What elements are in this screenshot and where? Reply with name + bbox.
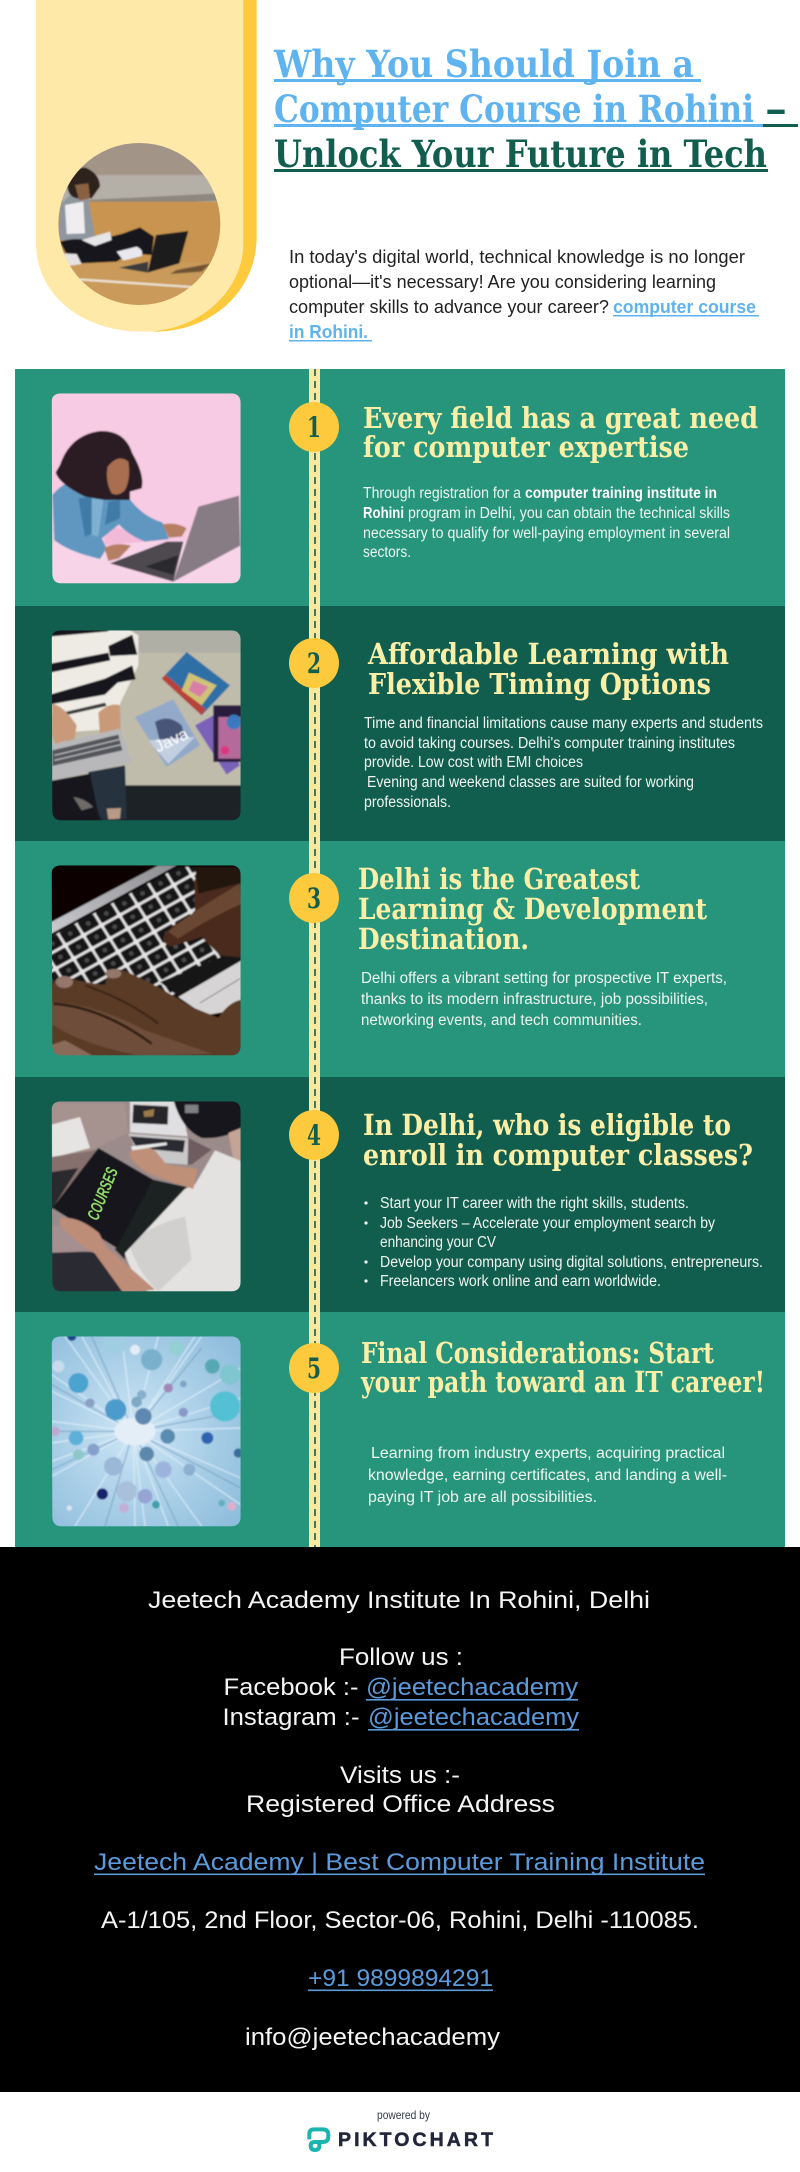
- intro paragraph: In today's digital world, technical knowledge is no longer: [289, 246, 745, 267]
- header decorative pill with photo: [36, 0, 257, 332]
- section 4 bullet list: Job Seekers – Accelerate your employment search by: [380, 1215, 715, 1232]
- section 5 text: paying IT job are all possibilities.: [368, 1489, 597, 1506]
- section 1 text: necessary to qualify for well-paying employment in several: [363, 525, 730, 542]
- section 4 number badge: [289, 1110, 339, 1160]
- address heading: Registered Office Address: [246, 1791, 555, 1818]
- section 3 heading: Delhi is the Greatest: [358, 862, 641, 896]
- powered by Piktochart logo: [309, 2108, 493, 2151]
- email: info@jeetechacademy: [245, 2024, 500, 2051]
- section 5 text: Learning from industry experts, acquiring practical: [371, 1445, 725, 1462]
- title: [273, 42, 798, 176]
- section 5 heading: [360, 1336, 765, 1399]
- photo: girl with laptop on pink: [52, 393, 241, 584]
- section 2 heading: Affordable Learning with: [367, 637, 729, 671]
- panel: section 1 background: [15, 369, 785, 606]
- section 3 number badge: [289, 873, 339, 923]
- section 3 heading: Learning & Development: [358, 892, 708, 926]
- social links: Facebook :-: [224, 1674, 358, 1701]
- section 1 text: computer training institute in: [525, 485, 717, 502]
- section 1 heading: [363, 401, 758, 464]
- section 5 number badge: 5: [307, 1352, 321, 1385]
- section 3 number badge: 3: [307, 882, 321, 915]
- section 1 heading: Every field has a great need: [363, 401, 758, 435]
- section 2 number badge: 2: [307, 647, 321, 680]
- social links: [222, 1644, 579, 1731]
- section 1 number badge: [289, 402, 339, 452]
- section 2 text: Evening and weekend classes are suited for working: [367, 774, 694, 791]
- section 3 text: thanks to its modern infrastructure, job possibilities,: [361, 991, 708, 1008]
- section 1 text: program in Delhi, you can obtain the technical skills: [408, 505, 730, 522]
- social links: Instagram :-: [222, 1704, 360, 1731]
- photo: blue crystal burst: [52, 1336, 241, 1526]
- website link: Jeetech Academy | Best Computer Training Institute: [94, 1849, 705, 1876]
- timeline dashed vertical line: [309, 369, 320, 1547]
- section 1 text: Through registration for a: [363, 485, 521, 502]
- section 5 text: knowledge, earning certificates, and landing a well-: [368, 1467, 727, 1484]
- social links: Follow us :: [339, 1644, 463, 1671]
- section 2 heading: [367, 637, 729, 701]
- title: Why You Should Join a: [273, 42, 694, 86]
- powered by Piktochart logo: PIKTOCHART: [338, 2129, 493, 2151]
- section 2 text: to avoid taking courses. Delhi's computer training institutes: [364, 735, 735, 752]
- section 3 text: networking events, and tech communities.: [361, 1012, 642, 1029]
- panel: section 4 background: [15, 1077, 785, 1312]
- photo: person holding tablet showing COURSES: COURSES: [83, 1164, 122, 1223]
- address heading: Visits us :-: [340, 1762, 460, 1789]
- section 1 text: sectors.: [363, 544, 411, 561]
- section 3 heading: [358, 862, 708, 956]
- intro paragraph: computer skills to advance your career?: [289, 296, 609, 317]
- section 4 heading: In Delhi, who is eligible to: [363, 1108, 731, 1142]
- section 4 bullet list: Develop your company using digital solutions, entrepreneurs.: [380, 1254, 763, 1271]
- powered by Piktochart logo: powered by: [377, 2108, 430, 2122]
- photo: person holding tablet showing COURSES: [52, 1101, 241, 1292]
- intro paragraph: computer course: [613, 296, 756, 317]
- section 2 text: Time and financial limitations cause many experts and students: [364, 715, 763, 732]
- intro paragraph: [289, 246, 759, 342]
- intro paragraph: optional—it's necessary! Are you considering learning: [289, 271, 716, 292]
- section 3 heading: Destination.: [358, 922, 529, 956]
- section 1 text: Rohini: [363, 505, 404, 522]
- section 2 text: provide. Low cost with EMI choices: [364, 754, 583, 771]
- phone link: +91 9899894291: [308, 1965, 493, 1992]
- section 1 text: [363, 485, 730, 561]
- section 2 text: professionals.: [364, 794, 451, 811]
- street address: A-1/105, 2nd Floor, Sector-06, Rohini, Delhi -110085.: [101, 1907, 699, 1934]
- title: –: [765, 87, 787, 131]
- section 4 heading: enroll in computer classes?: [363, 1138, 753, 1172]
- photo: student with laptop on wooden floor: [58, 143, 220, 305]
- section 1 number badge: 1: [307, 411, 321, 444]
- social links: @jeetechacademy: [366, 1674, 578, 1701]
- photo: hands typing on keyboard: [52, 865, 241, 1056]
- section 2 number badge: [289, 638, 339, 688]
- section 1 heading: for computer expertise: [363, 430, 689, 464]
- photo: student with laptop and books on sofa: Java: [151, 724, 192, 756]
- panel: section 2 background: [15, 606, 785, 841]
- icon: Piktochart P mark: [309, 2129, 328, 2150]
- section 2 text: [364, 715, 763, 811]
- section 4 number badge: 4: [307, 1119, 321, 1152]
- panel: section 3 background: [15, 841, 785, 1077]
- section 5 text: [368, 1445, 727, 1506]
- section 5 heading: Final Considerations: Start: [361, 1336, 714, 1370]
- social links: @jeetechacademy: [368, 1704, 579, 1731]
- intro paragraph: in Rohini.: [289, 321, 368, 342]
- photo: student with laptop and books on sofa: [52, 630, 241, 820]
- panel: contact footer: [0, 1547, 800, 2092]
- institute name: Jeetech Academy Institute In Rohini, Delhi: [148, 1587, 650, 1614]
- section 4 heading: [363, 1108, 753, 1172]
- section 5 number badge: [289, 1343, 339, 1393]
- panel: section 5 background: [15, 1312, 785, 1548]
- address heading: [246, 1762, 555, 1818]
- section 4 bullet list: Freelancers work online and earn worldwide.: [380, 1273, 661, 1290]
- section 4 bullet list: Start your IT career with the right skills, students.: [380, 1195, 689, 1212]
- section 4 bullet list: [364, 1195, 763, 1290]
- section 2 heading: Flexible Timing Options: [368, 667, 711, 701]
- section 4 bullet list: enhancing your CV: [380, 1234, 497, 1251]
- section 3 text: [361, 970, 727, 1029]
- section 3 text: Delhi offers a vibrant setting for prospective IT experts,: [361, 970, 727, 987]
